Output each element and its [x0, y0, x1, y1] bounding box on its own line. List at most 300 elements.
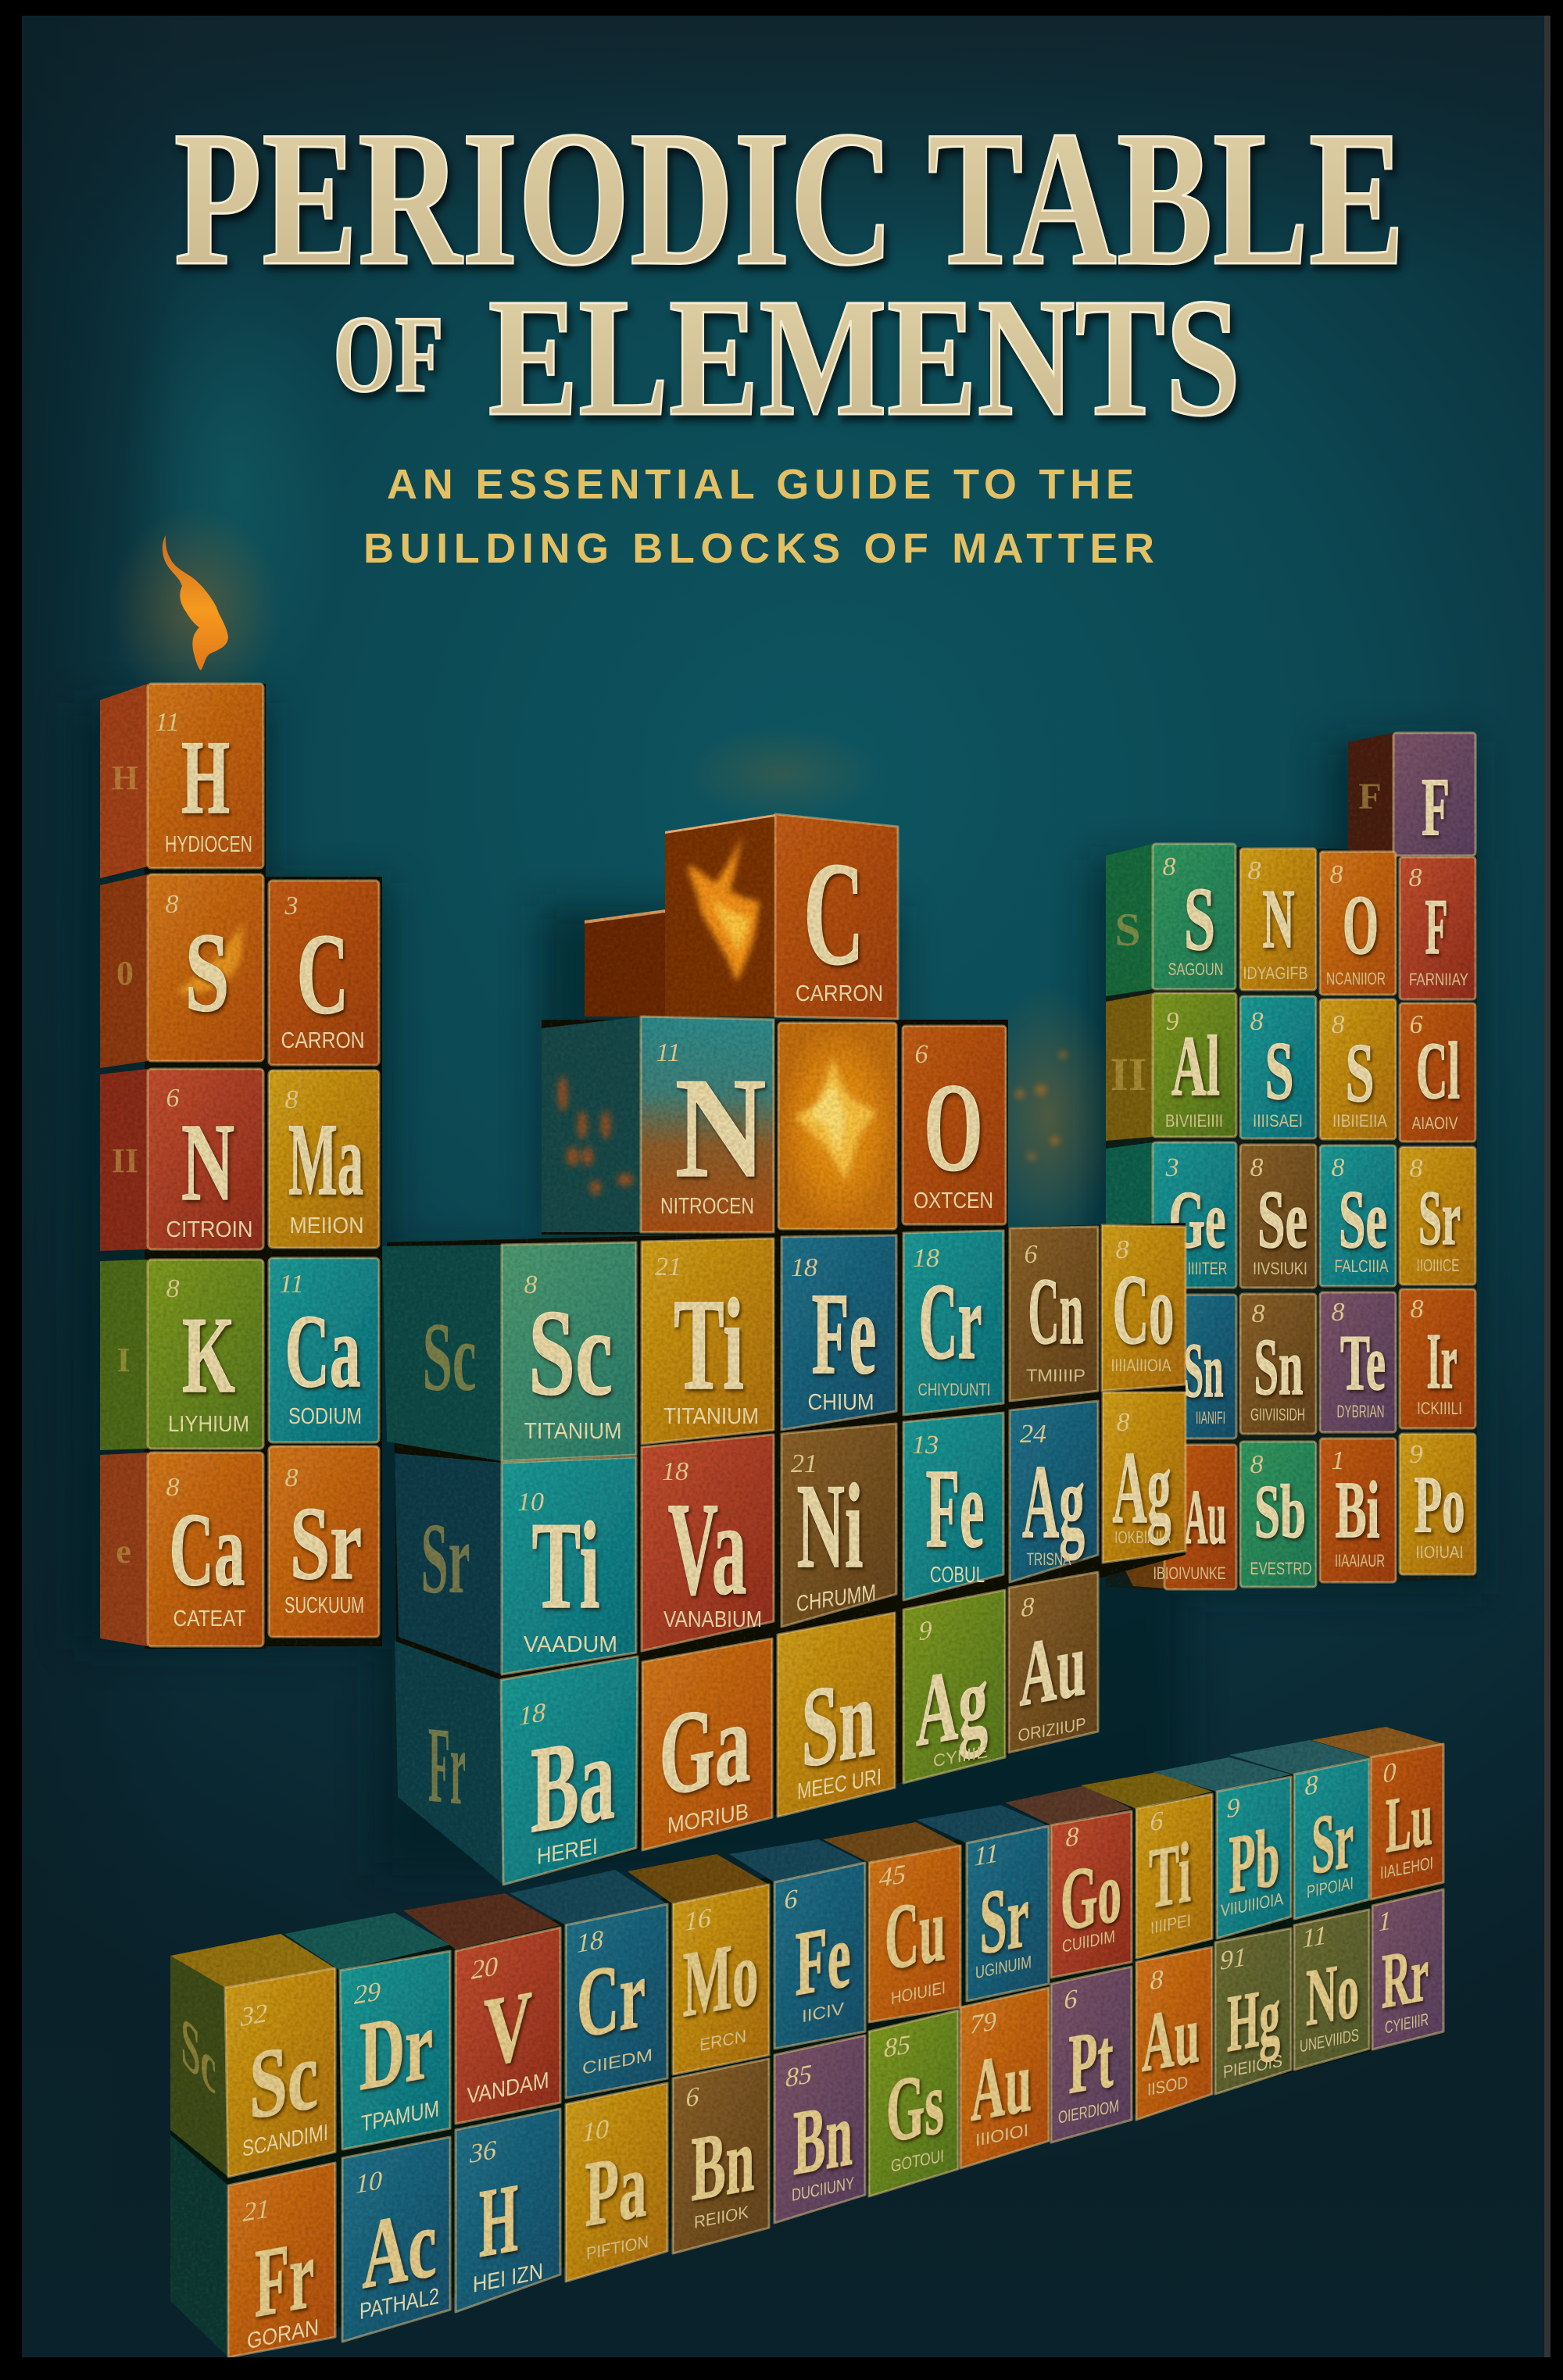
tile: Au: 79 — [970, 2006, 996, 2040]
tile: Sb: Sb — [1254, 1470, 1306, 1554]
tile: Al: Al — [1171, 1018, 1220, 1113]
tile: Mo: Mo — [683, 1920, 758, 2038]
tile: Sr: PIPOIAI — [1307, 1873, 1354, 1902]
tile: H: H — [112, 759, 138, 797]
tile: Ag — [903, 1590, 1005, 1783]
tile: N: N — [1263, 873, 1294, 966]
tile: Ag — [1010, 1401, 1098, 1582]
tile: Cr — [903, 1231, 1003, 1415]
tile: Gs: GOTOUI — [891, 2146, 944, 2176]
tile: Cr — [510, 1870, 667, 2098]
tile: Co: Co — [1113, 1254, 1174, 1365]
tile: Gs: 85 — [884, 2029, 910, 2064]
tile: Se: FALCIIIA — [1335, 1256, 1389, 1276]
tile: Ag: 9 — [918, 1615, 932, 1646]
tile: Se: 8 — [1332, 1153, 1344, 1182]
tile: Ti — [395, 1453, 636, 1674]
tile: Au: IIIOIOI — [975, 2120, 1028, 2150]
tile: Sb: EVESTRD — [1250, 1559, 1311, 1578]
tile: S: S — [1184, 870, 1215, 969]
tile: V: 20 — [471, 1951, 498, 1985]
tile: Ni: Ni — [797, 1459, 863, 1593]
right block — [1106, 733, 1477, 1590]
tile: S: S — [1346, 1027, 1374, 1120]
tile: Fr: 21 — [243, 2193, 270, 2228]
tile: N: 8 — [1247, 856, 1261, 885]
tile: Bn — [774, 2035, 865, 2223]
tile: Gs: Gs — [886, 2053, 944, 2162]
tile: Bi: Bi — [1335, 1465, 1380, 1555]
left stack — [100, 684, 382, 1649]
tile: O: 8 — [1330, 860, 1343, 889]
tile: Cr: 18 — [913, 1244, 939, 1273]
tile: Fr — [170, 2135, 335, 2357]
tile: Sc: 8 — [524, 1270, 538, 1299]
title: ELEMENTS — [488, 263, 1241, 451]
tile: N: NITROCEN — [660, 1194, 754, 1219]
tile: H: HEI IZN — [473, 2258, 543, 2298]
tile: Se — [1240, 1145, 1316, 1288]
tile: Ag: TRISNA — [1027, 1549, 1071, 1569]
tile: Au: Au — [1019, 1611, 1086, 1725]
tile: Sr — [1229, 1740, 1369, 1919]
tile: K: LIYHIUM — [168, 1412, 249, 1437]
tile: Dr — [284, 1913, 450, 2150]
tile: F: F — [1425, 883, 1447, 971]
tile: Hg: PIEIIOIS — [1223, 2051, 1282, 2082]
tile: Ti: Ti — [531, 1496, 600, 1635]
tile: Ti: 6 — [1150, 1806, 1164, 1837]
tile: Hg: 91 — [1220, 1942, 1246, 1976]
tile: Ac: Ac — [363, 2189, 436, 2310]
tile: Ti — [1081, 1772, 1212, 1958]
tile: Cn: TMIIIIP — [1026, 1366, 1086, 1385]
tile: Cr: 18 — [577, 1924, 603, 1959]
tile: N: II — [112, 1142, 138, 1180]
tile: Ba: 18 — [519, 1697, 545, 1731]
tile: Sr: 11 — [974, 1838, 999, 1872]
tile: F — [1400, 857, 1475, 999]
tile: S: 8 — [166, 890, 178, 919]
tile: S: S — [184, 910, 230, 1035]
subtitle: AN ESSENTIAL GUIDE TO THE — [387, 461, 1134, 508]
tile: V — [403, 1893, 560, 2124]
tile: Po: 9 — [1410, 1440, 1422, 1469]
tile: S: 8 — [1250, 1007, 1263, 1036]
tile: Ag: Ag — [1113, 1430, 1171, 1545]
tile: Sr: 8 — [1410, 1154, 1422, 1183]
tile: Pt: OIERDIOM — [1058, 2096, 1119, 2128]
tile: H — [100, 684, 263, 878]
tile: Fe: 18 — [791, 1253, 817, 1282]
tile: H: HYDIOCEN — [165, 832, 252, 857]
tile: Mo: 16 — [685, 1903, 711, 1937]
tile: Al — [1106, 993, 1236, 1141]
tile: Bn — [673, 2059, 769, 2253]
block shadows — [74, 703, 1481, 1875]
tile: Lu: Lu — [1386, 1774, 1432, 1869]
tile: Va: 18 — [662, 1457, 689, 1486]
tile: Sc: Sc — [528, 1285, 613, 1421]
tile: S — [1240, 996, 1316, 1138]
tile: Au: 8 — [1150, 1964, 1164, 1996]
tile: K: K — [182, 1295, 235, 1416]
tile: Sn — [1240, 1294, 1316, 1434]
tile: S — [1320, 999, 1396, 1139]
tile: Pa: Pa — [585, 2132, 647, 2247]
tile: Rr: CYIEIIIR — [1385, 2010, 1429, 2038]
tile: Se — [1320, 1145, 1396, 1286]
tile: Fe: IICIV — [802, 1999, 844, 2026]
tile: S: SAGOUN — [1168, 960, 1224, 979]
tile: Va: Va — [667, 1475, 747, 1622]
tile: H: 36 — [469, 2135, 496, 2169]
tile: O: OXTCEN — [914, 1188, 993, 1213]
tile: Va: VANABIUM — [663, 1607, 762, 1632]
tile: N: IDYAGIFB — [1243, 963, 1308, 983]
tile: Mo: ERCN — [699, 2026, 746, 2055]
tile: Ba — [395, 1641, 638, 1885]
tile: Cn: 6 — [1024, 1240, 1038, 1269]
tile: Fe: COBUL — [930, 1563, 985, 1588]
tile: Ba: Fr — [428, 1704, 466, 1828]
tile: N: CITROIN — [166, 1217, 253, 1242]
tile: Sr: Sr — [290, 1485, 362, 1601]
tile: Ag: Ag — [916, 1643, 988, 1768]
tile: Sr: 8 — [284, 1463, 299, 1492]
tile: N — [100, 1069, 263, 1251]
tile: Va — [642, 1435, 774, 1651]
tile: Sn: Sn — [802, 1653, 875, 1792]
tile: Cu: HOIUIEI — [891, 1978, 946, 2008]
tile: large C: CARRON — [796, 981, 883, 1006]
tile: No — [1294, 1910, 1369, 2070]
tile: C: 3 — [284, 892, 299, 920]
tile: Ma: Ma — [288, 1102, 363, 1217]
tile: Ac — [342, 2137, 450, 2342]
tile: Al: 9 — [1166, 1007, 1179, 1036]
tile: Sc: TITANIUM — [524, 1419, 622, 1444]
tile: Sn — [778, 1613, 895, 1817]
tile: Cl: AIAOIV — [1411, 1113, 1458, 1133]
tile: S: 8 — [1163, 852, 1175, 881]
tile: Ti: TITANIUM — [663, 1404, 759, 1429]
tile: Au: 8 — [1021, 1592, 1035, 1623]
tile: Sr: Sr — [1418, 1174, 1461, 1261]
tile: N — [1240, 849, 1316, 990]
tile: Lu — [1311, 1727, 1443, 1899]
tile: Ca: CATEAT — [173, 1606, 246, 1631]
tile: Sr — [269, 1446, 379, 1637]
tile: Cr: CIIEDM — [582, 2045, 653, 2078]
tile: Au — [1136, 1947, 1212, 2120]
title: OF — [333, 294, 444, 415]
tile: Fe — [903, 1413, 1003, 1600]
tile: Cn — [1010, 1227, 1098, 1401]
tile: Au: IISOD — [1147, 2072, 1188, 2099]
tile: Ac: 10 — [356, 2165, 382, 2200]
tile: Pt: Pt — [1069, 2010, 1113, 2112]
tile: Ir: 8 — [1410, 1295, 1424, 1324]
tile: No: UNEVIIIDS — [1300, 2025, 1359, 2057]
tile: Bn: REIIOK — [694, 2202, 749, 2232]
icon: flame above hydrogen — [163, 535, 228, 670]
tile: Cl — [1400, 1003, 1475, 1142]
tile: Se: IIVSIUKI — [1253, 1259, 1307, 1278]
tile: Ir: ICKIIILI — [1417, 1399, 1462, 1418]
tile: Au — [1153, 1445, 1236, 1589]
tile: Se: Se — [1339, 1174, 1387, 1265]
tile: Cn: Cn — [1028, 1259, 1083, 1364]
tile: Al: BIVIIEIIII — [1165, 1111, 1223, 1131]
tile: Bn: 85 — [785, 2059, 812, 2093]
tile: Dr: TPAMUM — [361, 2096, 439, 2137]
tile: Se: 8 — [1250, 1153, 1263, 1182]
tile: Po — [1400, 1434, 1475, 1574]
tile: Ge: 3 — [1164, 1153, 1179, 1182]
subtitle — [363, 461, 1154, 572]
tile: Bi: IIAAIAUR — [1335, 1551, 1385, 1571]
embers beside oxygen — [1015, 1051, 1067, 1160]
tile: Sr: UGINUIM — [975, 1952, 1032, 1982]
tile: Cr: Cr — [919, 1261, 982, 1382]
tile: Sr: IIOIIICE — [1416, 1256, 1460, 1275]
tile: Cl: Cl — [1416, 1026, 1460, 1116]
tile: Bn: Bn — [691, 2107, 755, 2221]
tile: Sc: 32 — [240, 1998, 267, 2032]
tile: Fe: 6 — [784, 1884, 798, 1915]
tile: top F — [1348, 733, 1475, 856]
tile: Sr: Sr — [1311, 1793, 1354, 1892]
tile: Sn — [1164, 1295, 1236, 1438]
tile: Ca: Ca — [169, 1492, 245, 1607]
tile: Au: Au — [971, 2032, 1032, 2140]
tile: Sn: IIANIFI — [1196, 1408, 1225, 1428]
tile: S: S — [1264, 1025, 1294, 1117]
tile: Ti: Ti — [1149, 1824, 1191, 1927]
tile: Fr: GORAN — [247, 2314, 319, 2354]
tile: Pa: PIFTION — [586, 2232, 649, 2264]
tile: Ma: MEIION — [289, 1213, 364, 1238]
title — [173, 91, 1405, 451]
tile: top F: F — [1358, 776, 1382, 817]
tile: Ga: MORIUB — [667, 1799, 749, 1839]
tile: Go — [1005, 1785, 1132, 1978]
tile: Dr: Dr — [359, 1990, 433, 2111]
tile: Fe — [782, 1235, 896, 1430]
tile: Ba: HEREI — [537, 1834, 598, 1870]
tile: O: 6 — [914, 1040, 928, 1069]
tile: Te — [1320, 1292, 1396, 1432]
tile: Lu: 0 — [1382, 1757, 1397, 1789]
tile: V: VANDAM — [467, 2067, 549, 2109]
tile: Fe — [729, 1839, 865, 2049]
tile: Bi — [1320, 1438, 1396, 1582]
tile: Lu: IIALEHOI — [1380, 1853, 1433, 1883]
tile: Sc: Sc — [181, 1999, 216, 2111]
tile: Ti: 21 — [655, 1253, 681, 1281]
tile: Ni: CHRUMM — [796, 1580, 876, 1617]
tile: Ca — [100, 1453, 263, 1646]
tile: Fe: CHIUM — [808, 1390, 874, 1415]
tile: Ca: Ca — [284, 1293, 361, 1409]
tile: Ga — [642, 1638, 772, 1850]
tile: Sc: Sc — [422, 1303, 477, 1412]
tile: K: 8 — [166, 1274, 180, 1303]
tile: Rr: Rr — [1382, 1929, 1429, 2024]
tile: H: 11 — [155, 708, 180, 737]
tile: Bn: DUCIIUNY — [792, 2173, 854, 2205]
tile: No: No — [1306, 1944, 1359, 2043]
tile: Te: DYBRIAN — [1336, 1402, 1385, 1421]
tile: Rr — [1372, 1889, 1443, 2049]
tile: Ni: 21 — [791, 1449, 817, 1478]
tile: Fe: Fe — [811, 1269, 877, 1399]
tile: Cu — [823, 1822, 960, 2022]
tile: Au: Au — [1142, 1988, 1200, 2089]
tile: K — [100, 1260, 263, 1450]
tile: Sn: GIIVIISIDH — [1250, 1405, 1305, 1424]
tile: Al: II — [1111, 1049, 1146, 1100]
tile: Hg: Hg — [1227, 1970, 1280, 2069]
tile: S: 0 — [116, 954, 134, 992]
tile: Sn: Sn — [1254, 1322, 1304, 1412]
tile: fire — [778, 1023, 896, 1229]
tile: Ma: 8 — [284, 1085, 299, 1114]
tile: Fe: Fe — [925, 1446, 985, 1571]
tile: Te: Te — [1340, 1319, 1386, 1407]
tile: Cr: CHIYDUNTI — [917, 1380, 991, 1399]
tile: No: 11 — [1302, 1920, 1327, 1954]
tile: Ti: 10 — [517, 1488, 544, 1517]
bottom row block: lanthanides and actinides — [170, 1727, 1443, 2357]
tile: Sc — [170, 1934, 335, 2177]
tile: S: S — [1114, 904, 1141, 956]
tile: C: CARRON — [281, 1028, 364, 1053]
tile: Ca: 8 — [166, 1473, 180, 1502]
tile: H: H — [479, 2164, 518, 2278]
tile: K: I — [116, 1341, 131, 1379]
tile: Go: 8 — [1065, 1821, 1079, 1853]
tile: Ac: PATHAL2 — [359, 2283, 439, 2325]
tile: H — [456, 2109, 560, 2312]
tile: Ag — [1103, 1392, 1186, 1563]
tile: Bn: Bn — [793, 2082, 853, 2195]
tile: Po: IIOIUAI — [1416, 1542, 1463, 1562]
tile: N: N — [181, 1100, 234, 1224]
tile: Rr: 1 — [1378, 1906, 1392, 1937]
tile: S: 8 — [1332, 1010, 1344, 1039]
tile: C — [269, 881, 379, 1065]
tile: Co — [1102, 1225, 1186, 1391]
tile: F: 8 — [1408, 863, 1422, 892]
tile: S: IIBIIEIIA — [1332, 1111, 1387, 1131]
tile: Sn: Sn — [1183, 1327, 1224, 1413]
tile: Sc: SCANDIMI — [242, 2119, 328, 2162]
tile: Au: IBIOIVUNKE — [1153, 1563, 1225, 1583]
tile: N: 6 — [166, 1084, 180, 1113]
tile: Ba: Ba — [531, 1707, 615, 1859]
tile: O: O — [1343, 879, 1379, 972]
tile: Bn: 6 — [685, 2082, 699, 2113]
tile: large C — [665, 814, 898, 1019]
tile: Ir — [1400, 1289, 1475, 1428]
tile: Pb: Pb — [1229, 1811, 1279, 1912]
tile: Ca: SODIUM — [288, 1404, 362, 1429]
tile: Sb: 8 — [1250, 1450, 1263, 1479]
tile: S — [100, 874, 263, 1068]
tile: Ge — [1106, 1142, 1236, 1288]
tile: Ca: e — [116, 1532, 131, 1571]
tile: Te: 8 — [1332, 1298, 1344, 1327]
tile: Fe: Fe — [796, 1903, 850, 2015]
tile: S — [1106, 844, 1236, 996]
tile: small dark block — [585, 909, 665, 1017]
tile: Sb — [1240, 1442, 1316, 1587]
tile: Sc: Sc — [249, 2021, 318, 2141]
tile: C: C — [297, 910, 349, 1038]
tile: Pt: 6 — [1064, 1984, 1078, 2015]
tile: Sc — [382, 1242, 636, 1461]
tile: H: H — [181, 720, 230, 836]
tile: Au — [1009, 1572, 1098, 1753]
tile: Au: Au — [1184, 1474, 1226, 1560]
tile: Ma — [269, 1070, 379, 1248]
tile: Ti — [642, 1238, 774, 1444]
tile: Ag: Ag — [1022, 1444, 1085, 1560]
tile: Gs — [869, 2010, 958, 2196]
tile: Pb — [1153, 1757, 1291, 1939]
tile: Sr: Sr — [980, 1866, 1028, 1974]
tile: Au: ORIZIIUP — [1018, 1714, 1086, 1746]
tile: Dr: 29 — [354, 1976, 381, 2010]
tile: O — [903, 1026, 1006, 1224]
tile: Sr: SUCKUUM — [284, 1593, 364, 1618]
tile: Ir: Ir — [1427, 1317, 1457, 1406]
tile: Ti: IIIIPEI — [1150, 1910, 1191, 1938]
tile: V: V — [484, 1971, 532, 2087]
tile: Fr: Fr — [255, 2220, 314, 2339]
tile: Pa: 10 — [582, 2114, 609, 2148]
tile: Pb: VIIUIIIOIA — [1221, 1889, 1283, 1921]
tile: Cl: 6 — [1410, 1010, 1422, 1039]
tile: O — [1320, 852, 1396, 995]
tile: S: IIIISAEI — [1253, 1111, 1303, 1131]
tile: Sn: 8 — [1252, 1299, 1264, 1328]
tile: Se: Se — [1257, 1174, 1307, 1265]
tile: Ge: Ge — [1169, 1174, 1225, 1265]
tile: F: FARNIIAY — [1409, 970, 1468, 989]
tile: Ga: Ga — [660, 1675, 750, 1821]
tile: Co: IIIIAIIIOIA — [1111, 1356, 1171, 1375]
tile: Sr: 8 — [1304, 1770, 1318, 1801]
tile: O: NCANIIOR — [1326, 969, 1386, 988]
tile: Mo — [628, 1854, 769, 2074]
tile: Co: 8 — [1116, 1235, 1128, 1264]
tile: Ti: Sr — [420, 1503, 470, 1615]
tile: Fe: 13 — [912, 1431, 939, 1460]
tile: Cu: Cu — [885, 1877, 946, 1990]
tile: Pa — [566, 2083, 667, 2282]
tile: N: N — [675, 1048, 766, 1207]
tile: large C: C — [803, 832, 864, 996]
tile: Sn: MEEC URI — [797, 1764, 882, 1805]
tile: Cu: 45 — [879, 1859, 906, 1893]
tile: Ge: IIIITER — [1188, 1259, 1227, 1278]
tile: Hg — [1215, 1928, 1291, 2094]
tile: Sr — [1400, 1147, 1475, 1285]
tile: Ag: 24 — [1020, 1420, 1046, 1449]
